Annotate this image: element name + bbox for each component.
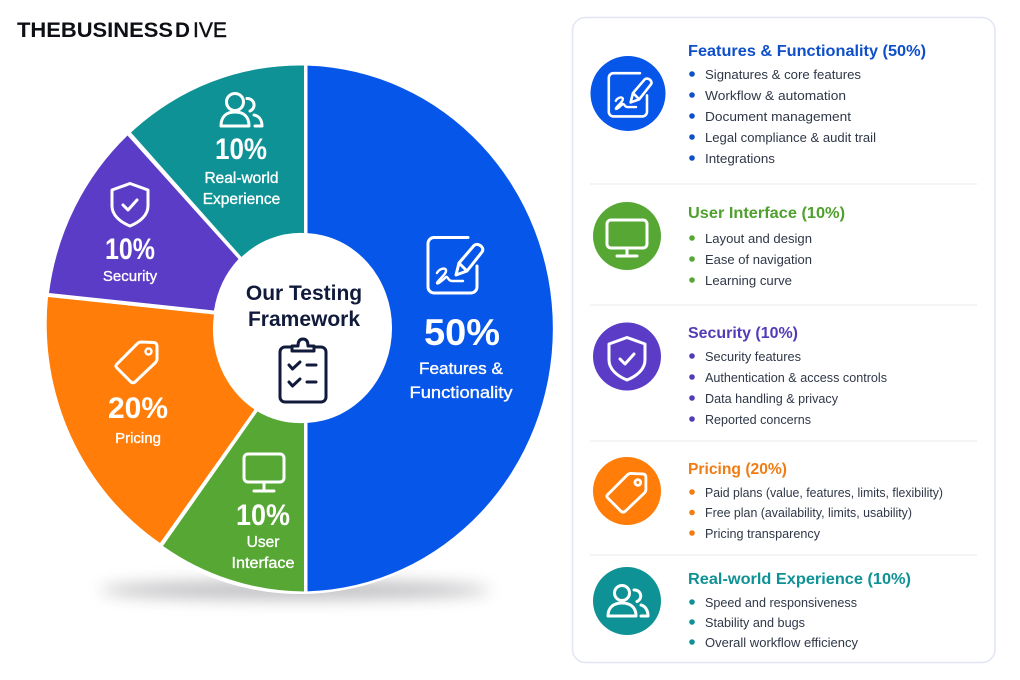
section: pricing: Pricing (20%) bbox=[688, 461, 787, 478]
segment: real-world experience 10% bbox=[131, 66, 304, 257]
section: pricing: Pricing transparency bbox=[705, 526, 820, 541]
section: user interface: Ease of navigation bbox=[705, 252, 812, 267]
label: 10% user interface: Interface bbox=[232, 555, 294, 572]
panel: criteria list bbox=[572, 18, 995, 662]
label: 10% security bbox=[103, 184, 158, 285]
section: features and functionality: Integrations bbox=[705, 151, 776, 166]
section: real-world experience: Speed and responsiveness bbox=[705, 595, 857, 610]
icon: price tag bbox=[116, 342, 157, 383]
label: 10% real-world experience: Experience bbox=[203, 191, 280, 208]
icon: shield badge bbox=[593, 322, 661, 390]
section: pricing: Paid plans (value, features, limits, flexibility) bbox=[705, 485, 943, 500]
icon: monitor bbox=[244, 454, 284, 491]
icon: people badge bbox=[593, 567, 661, 635]
center label: our testing framework: Our Testing bbox=[246, 282, 362, 305]
icon: people bbox=[221, 94, 262, 126]
section: security bbox=[593, 322, 887, 427]
label: 50% features and functionality: Functionality bbox=[410, 383, 513, 402]
label: 10% real-world experience bbox=[203, 94, 280, 208]
section: security: Authentication & access controls bbox=[705, 370, 887, 385]
icon: price tag badge bbox=[593, 457, 661, 525]
section: features and functionality: Document management bbox=[705, 109, 851, 124]
section: features and functionality: Workflow & automation bbox=[705, 88, 846, 103]
logo: The Business Dive: IVE bbox=[193, 18, 227, 42]
label: 10% user interface: 10% bbox=[236, 499, 290, 532]
segment: security 10% bbox=[49, 136, 238, 310]
section: security: Security features bbox=[705, 349, 801, 364]
section: user interface: Layout and design bbox=[705, 231, 812, 246]
segment: features and functionality 50% bbox=[308, 66, 553, 591]
segment: user interface 10% bbox=[163, 412, 304, 591]
icon: monitor badge bbox=[593, 202, 661, 270]
section: features and functionality: Features & Functionality (50%) bbox=[688, 43, 926, 60]
section: real-world experience: Overall workflow efficiency bbox=[705, 635, 858, 650]
section: user interface bbox=[593, 202, 845, 288]
center label: our testing framework: Framework bbox=[248, 308, 360, 331]
label: 50% features and functionality bbox=[410, 238, 513, 402]
pie shadow bbox=[100, 581, 490, 599]
section: security: Reported concerns bbox=[705, 412, 811, 427]
section: features and functionality: Signatures & core features bbox=[705, 67, 862, 82]
label: 20% pricing bbox=[108, 342, 168, 447]
label: 20% pricing: Pricing bbox=[115, 430, 161, 447]
pie chart bbox=[45, 63, 555, 594]
section: security: Security (10%) bbox=[688, 325, 798, 342]
segment: pricing 20% bbox=[47, 297, 254, 543]
label: 10% user interface: User bbox=[247, 534, 279, 551]
label: 50% features and functionality: 50% bbox=[424, 312, 500, 353]
section: real-world experience: Real-world Experience (10%) bbox=[688, 571, 911, 588]
label: 10% security: Security bbox=[103, 268, 158, 285]
pie outer rim bbox=[45, 63, 555, 594]
section: security: Data handling & privacy bbox=[705, 391, 838, 406]
logo: The Business Dive: D bbox=[175, 18, 190, 42]
icon: signed document bbox=[428, 238, 483, 293]
label: 20% pricing: 20% bbox=[108, 392, 168, 425]
center label: our testing framework bbox=[246, 282, 362, 402]
label: 10% security: 10% bbox=[105, 233, 155, 266]
section: features and functionality: Legal compliance & audit trail bbox=[705, 130, 876, 145]
label: 10% real-world experience: Real-world bbox=[204, 170, 279, 187]
icon: signed document badge bbox=[590, 56, 666, 131]
logo: The Business Dive: THEBUSINESS bbox=[17, 18, 173, 42]
section: pricing: Free plan (availability, limits, usability) bbox=[705, 505, 912, 520]
icon: clipboard checklist bbox=[280, 339, 326, 402]
section: user interface: User Interface (10%) bbox=[688, 205, 845, 222]
label: 50% features and functionality: Features & bbox=[419, 359, 504, 378]
label: 10% user interface bbox=[232, 454, 294, 572]
section: features and functionality bbox=[590, 43, 926, 166]
section: real-world experience bbox=[593, 567, 911, 650]
label: 10% real-world experience: 10% bbox=[215, 133, 267, 166]
icon: shield bbox=[112, 184, 148, 226]
section: real-world experience: Stability and bugs bbox=[705, 615, 805, 630]
section: user interface: Learning curve bbox=[705, 273, 792, 288]
section: pricing bbox=[593, 457, 943, 541]
